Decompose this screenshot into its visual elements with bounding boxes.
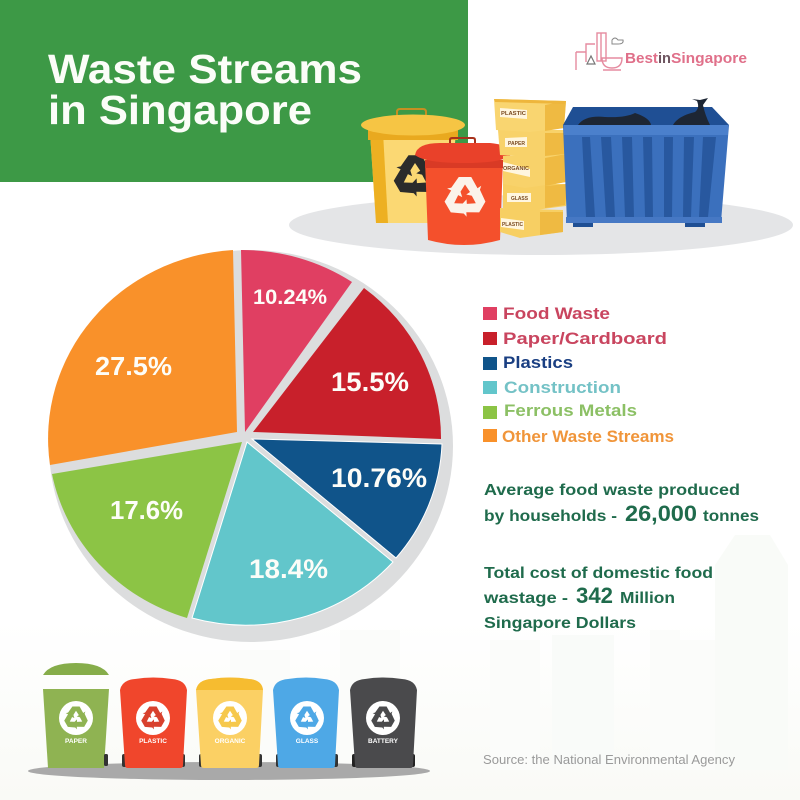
logo: BestinSingapore: in — [658, 50, 671, 67]
title: in Singapore — [48, 87, 312, 133]
icon: battery bin — [350, 678, 417, 768]
legend: Food Waste — [503, 304, 610, 323]
pie backing disc — [49, 250, 453, 642]
stat: household food waste: 26,000 — [625, 501, 697, 526]
icon: stack of labelled boxes: PAPER — [508, 141, 525, 147]
green header panel — [0, 0, 468, 182]
legend: Construction — [504, 378, 621, 397]
stat: cost of food wastage: 342 — [576, 583, 613, 608]
stat: household food waste: Average food waste produced — [484, 482, 740, 499]
logo: BestinSingapore — [576, 33, 747, 70]
pie percentage labels: 17.6% — [110, 495, 183, 525]
stat: household food waste: tonnes — [703, 508, 759, 525]
slice: Other Waste Streams — [48, 250, 237, 465]
faint city skyline background — [230, 535, 788, 770]
stat: cost of food wastage — [483, 565, 713, 632]
icon: stack of labelled boxes: PLASTIC — [502, 222, 523, 228]
slice: Plastics — [252, 439, 442, 558]
pie percentage labels: 18.4% — [249, 554, 328, 584]
ground shadow under bins — [289, 195, 793, 255]
stat: cost of food wastage: Total cost of domestic food — [484, 565, 713, 582]
logo: BestinSingapore: Singapore — [671, 50, 747, 67]
slice: Paper/Cardboard — [253, 288, 441, 439]
icon: red recycling bin — [415, 138, 512, 245]
legend — [483, 304, 674, 446]
pie percentage labels: 10.76% — [331, 463, 427, 493]
icon: organic bin — [196, 678, 263, 768]
stat: household food waste: by households - — [484, 508, 617, 525]
icon: battery bin: BATTERY — [368, 738, 399, 745]
pie percentage labels: 15.5% — [331, 367, 409, 397]
logo: BestinSingapore: Best — [625, 50, 658, 67]
icon: stack of labelled boxes — [494, 99, 568, 238]
title: Waste Streams — [48, 46, 362, 92]
stat: cost of food wastage: Singapore Dollars — [484, 615, 636, 632]
icon: blue dumpster with rubbish bags — [563, 98, 729, 227]
icon: plastic bin: PLASTIC — [139, 738, 167, 745]
icon: stack of labelled boxes: GLASS — [511, 196, 528, 202]
icon: glass bin — [273, 678, 339, 768]
slice: Food Waste — [241, 250, 352, 432]
icon: yellow recycling bin — [361, 109, 465, 223]
icon: paper bin: PAPER — [65, 738, 87, 745]
icon: plastic bin — [120, 678, 187, 768]
pie percentage labels: 10.24% — [253, 286, 327, 309]
pie percentage labels: 27.5% — [95, 351, 172, 381]
legend: Paper/Cardboard — [503, 329, 667, 348]
icon: glass bin: GLASS — [296, 738, 319, 745]
icon: stack of labelled boxes: PLASTIC — [501, 111, 526, 117]
slice: Ferrous Metals — [52, 442, 242, 618]
legend: Ferrous Metals — [504, 401, 637, 420]
stat: cost of food wastage: wastage - — [483, 590, 568, 607]
icon: paper bin — [43, 663, 109, 768]
shadow under bottom bins — [28, 762, 430, 780]
legend: Other Waste Streams — [502, 427, 674, 446]
legend: Plastics — [503, 353, 573, 372]
pie percentage labels — [95, 286, 427, 584]
icon: organic bin: ORGANIC — [215, 738, 246, 745]
pie chart — [48, 250, 453, 642]
icon: stack of labelled boxes: ORGANIC — [503, 166, 529, 172]
title — [48, 46, 362, 133]
source note: Source: the National Environmental Agency — [483, 752, 735, 767]
stat: household food waste — [484, 482, 759, 526]
slice: Construction — [192, 442, 393, 625]
stat: cost of food wastage: Million — [620, 590, 675, 607]
